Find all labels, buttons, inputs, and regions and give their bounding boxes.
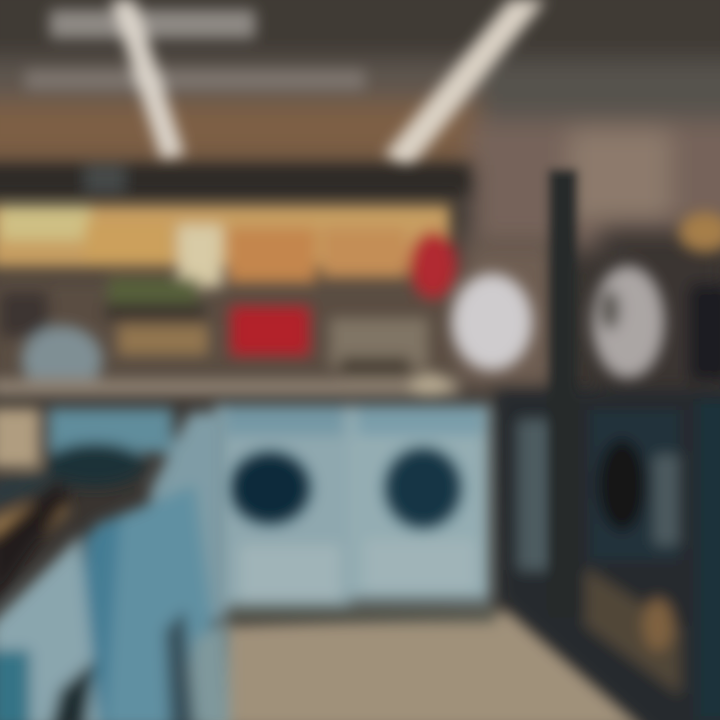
shelf top colourful row <box>0 205 720 397</box>
ceiling lights <box>25 0 545 170</box>
floor <box>210 610 650 720</box>
right dark machines <box>495 390 720 720</box>
washer doors <box>230 448 461 528</box>
ceiling <box>0 0 720 250</box>
centre washers <box>215 405 495 622</box>
left washers <box>0 408 230 720</box>
dark band under ceiling <box>0 165 470 195</box>
shelves <box>0 230 720 400</box>
dark pillar <box>549 170 577 615</box>
